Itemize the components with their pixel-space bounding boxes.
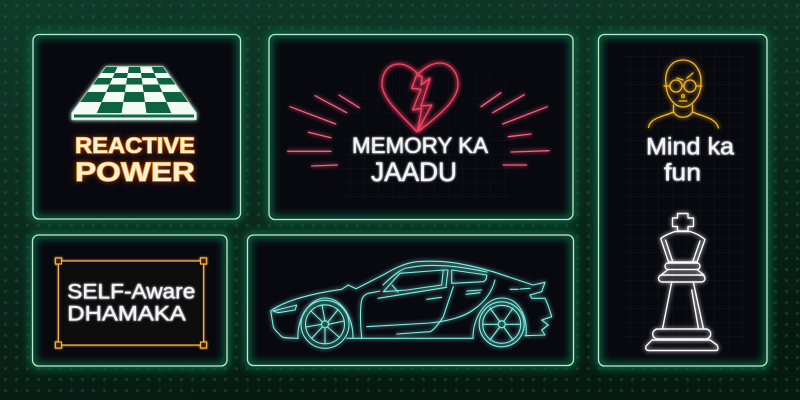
icon: chess king <box>646 214 718 350</box>
heading: memory ka jaadu: MEMORY KA <box>352 133 488 158</box>
panel: reactive power <box>33 34 240 219</box>
heading: mind ka fun: fun <box>664 160 701 186</box>
heading: memory ka jaadu <box>352 133 488 187</box>
heading: mind ka fun: Mind ka <box>646 134 734 160</box>
icon: neon sports car <box>271 261 552 338</box>
heading: reactive power <box>75 133 195 187</box>
panel: memory ka jaadu <box>269 34 573 220</box>
heading: reactive power: REACTIVE <box>75 133 195 158</box>
icon: rear wheel <box>479 302 524 347</box>
panel: self-aware dhamaka <box>32 235 227 366</box>
heading: mind ka fun <box>646 134 734 186</box>
panel: mind ka fun and king <box>598 34 767 366</box>
heading: self-aware dhamaka: DHAMAKA <box>67 302 187 326</box>
icon: chessboard <box>72 67 196 120</box>
heading: reactive power: POWER <box>75 157 195 187</box>
selection frame <box>56 258 206 348</box>
heading: self-aware dhamaka: SELF-Aware <box>67 280 195 304</box>
heading: self-aware dhamaka <box>67 280 195 326</box>
panel: car <box>248 235 574 366</box>
rays: left and right <box>288 93 549 166</box>
icon: person with glasses <box>648 60 718 128</box>
heading: memory ka jaadu: JAADU <box>371 157 457 187</box>
icon: broken heart <box>382 63 458 132</box>
icon: front wheel <box>301 300 349 348</box>
